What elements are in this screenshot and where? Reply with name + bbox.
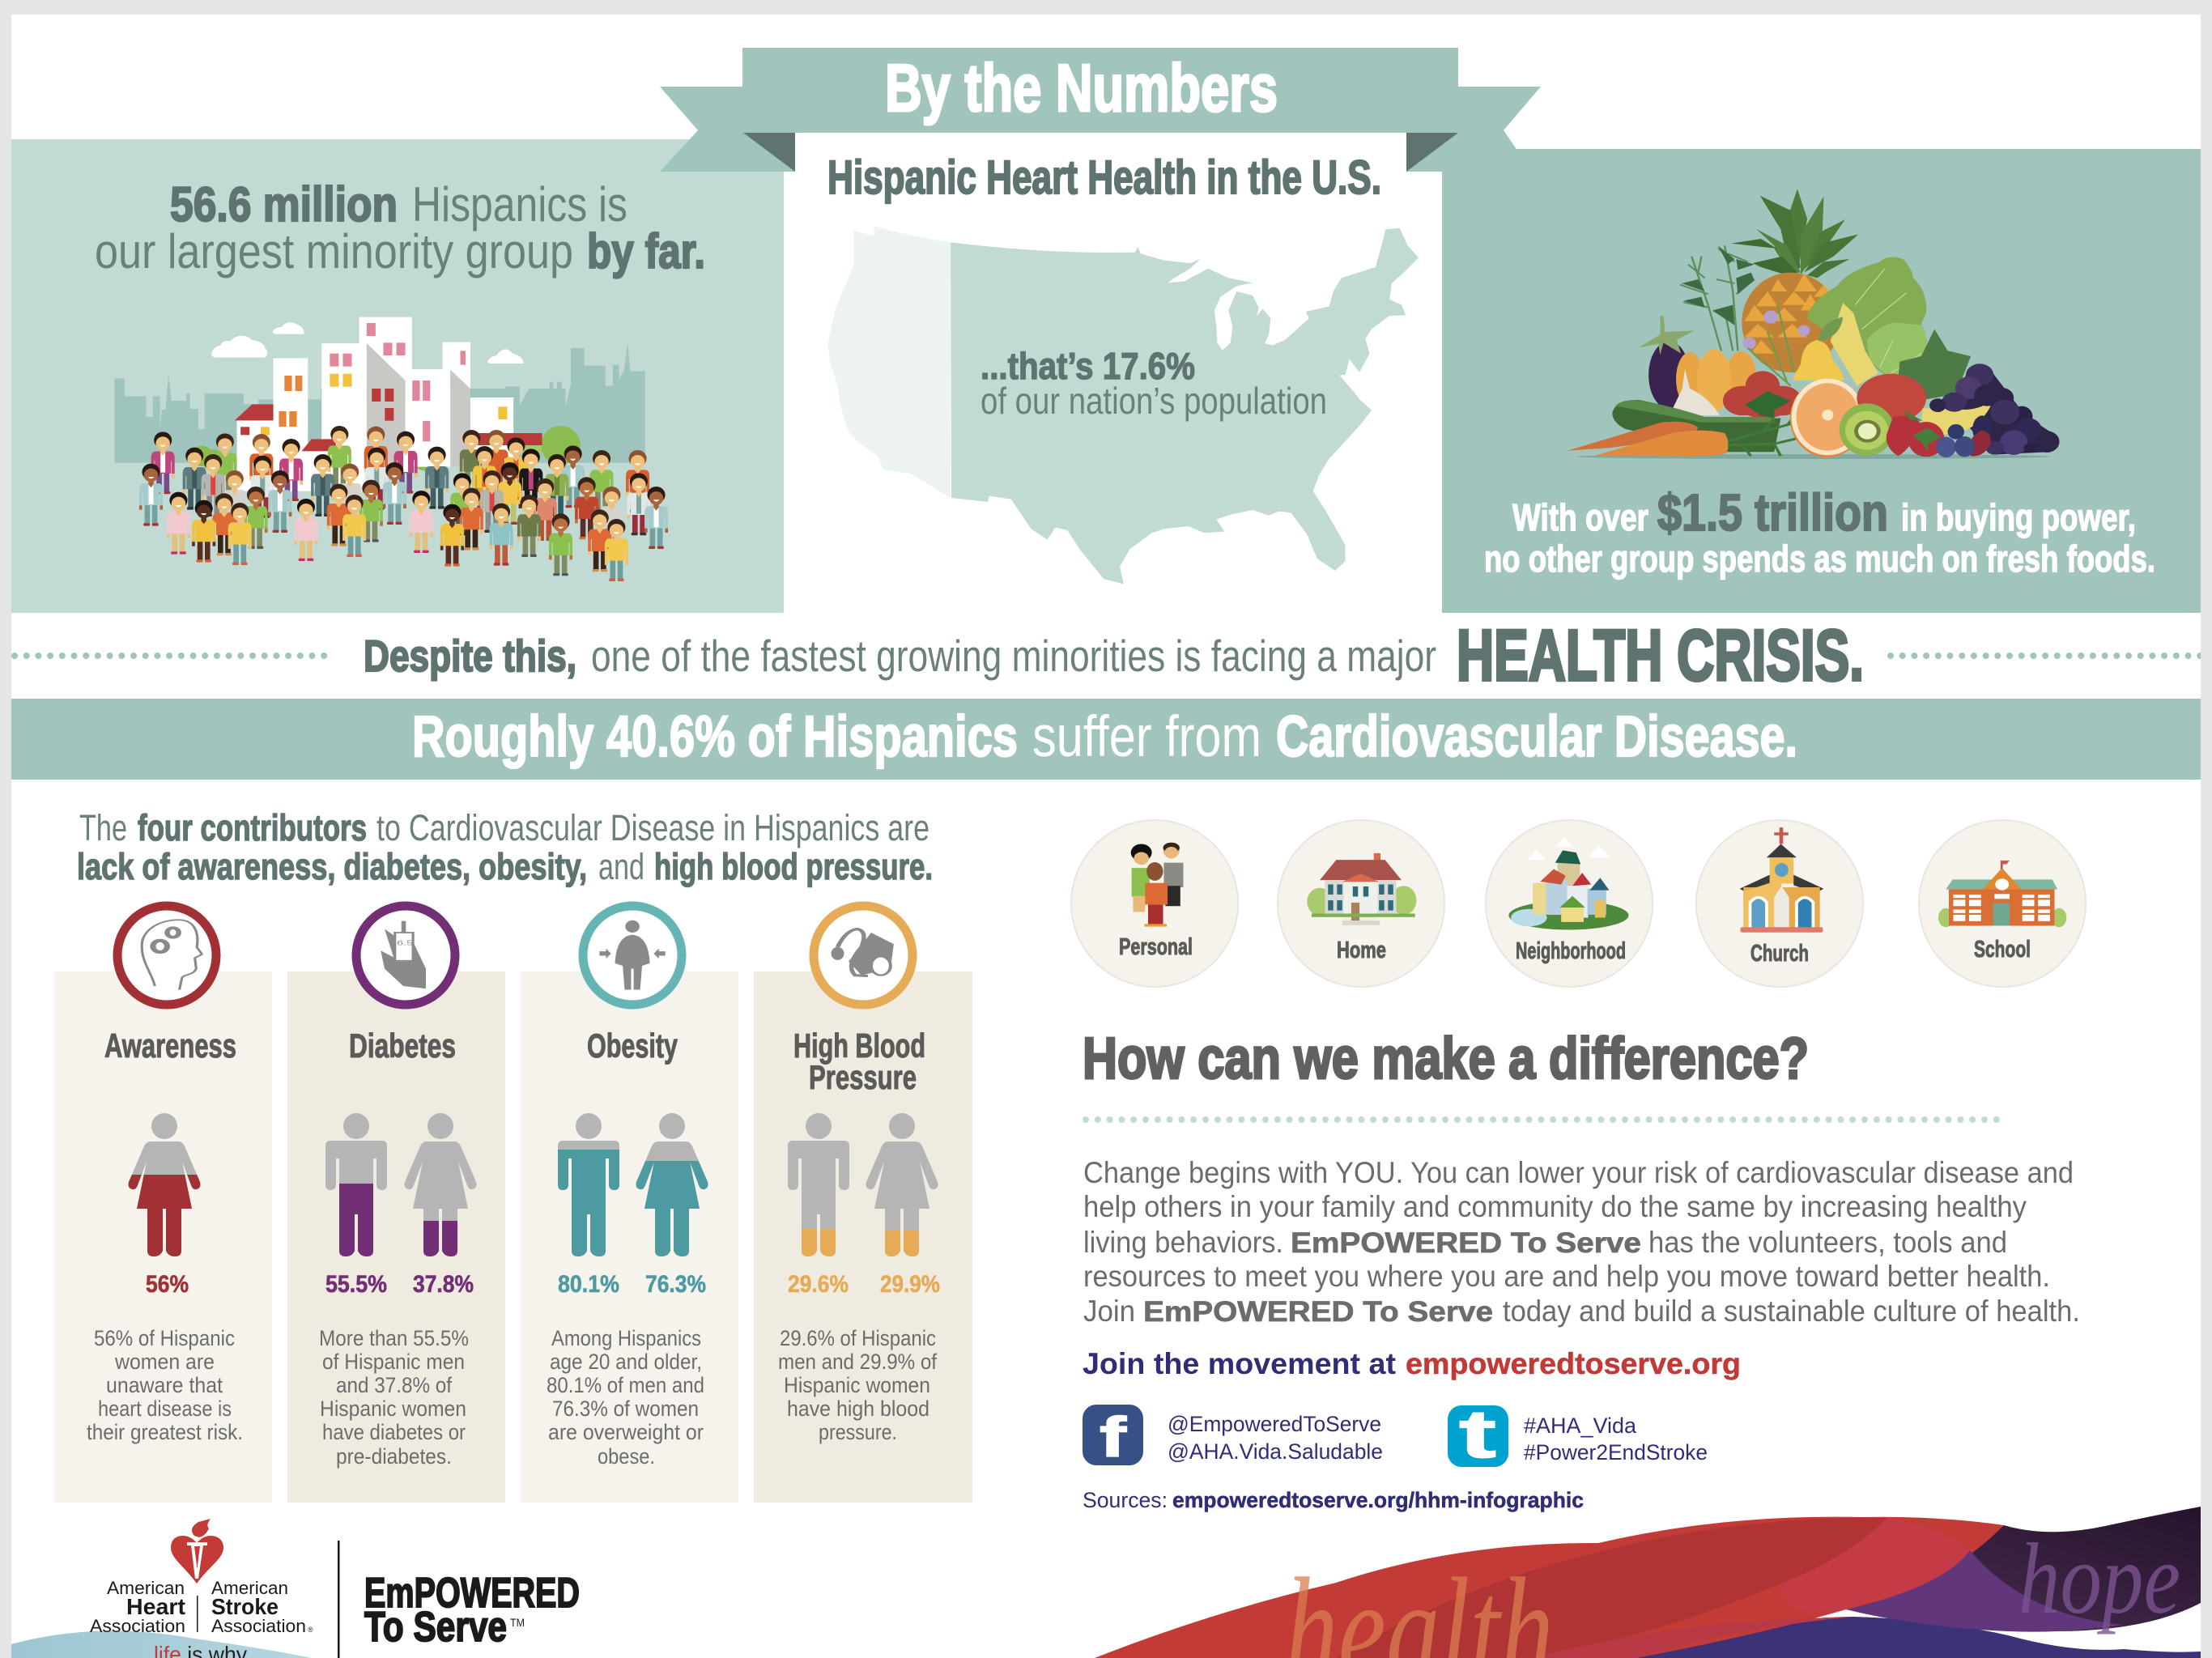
heading: How can we make a difference: How can we make a difference? [1083, 1027, 1809, 1091]
figure: man 80.1% [558, 1113, 619, 1256]
description: are overweight or [548, 1420, 704, 1444]
description: pre-diabetes. [336, 1444, 452, 1469]
people: back row [151, 426, 649, 518]
percentages: 55.5% [325, 1271, 387, 1298]
panel: Awareness [54, 906, 272, 1503]
herbs [1680, 245, 1755, 351]
icon: Facebook [1083, 1405, 1143, 1469]
circles: levels of change [1071, 820, 2086, 987]
description: men and 29.9% of [778, 1350, 937, 1374]
pineapple [1742, 273, 1840, 372]
logo: EmPOWERED To Serve: To Serve [364, 1604, 507, 1651]
body text: resources to meet you where you are and help you move toward better health. [1083, 1260, 2050, 1293]
icon: hand with glucose meter [356, 906, 455, 1005]
apple [1857, 374, 1926, 423]
buying power statement: in buying power, [1901, 496, 2136, 538]
logo: American Heart and Stroke Association: American [107, 1578, 185, 1598]
percentages: 29.6% [788, 1271, 849, 1298]
divider statement: health crisis: HEALTH CRISIS. [1457, 614, 1864, 695]
contributors intro: four contributors [138, 807, 367, 848]
icon: Facebook: f [1100, 1405, 1127, 1469]
banner: cardiovascular disease [11, 699, 2201, 780]
body text: EmPOWERED To Serve [1291, 1227, 1641, 1259]
description [319, 1326, 469, 1469]
carrots [1568, 391, 1820, 457]
banana [1921, 402, 1991, 435]
description: heart disease is [98, 1397, 232, 1421]
description: Hispanic women [320, 1397, 466, 1421]
figure: woman 37.8% [405, 1113, 476, 1256]
page edge: right margin [2201, 0, 2212, 1658]
grapes base [1953, 372, 2058, 455]
divider statement: health crisis: Despite this, [364, 631, 576, 681]
body text: EmPOWERED To Serve [1143, 1296, 1493, 1328]
logo: EmPOWERED To Serve: TM [510, 1616, 525, 1629]
population statement: Hispanics is [412, 177, 627, 232]
lettuce [1807, 257, 1927, 376]
percentages: 29.9% [880, 1271, 940, 1298]
banner: cardiovascular disease: Roughly 40.6% of Hispanics [412, 705, 1018, 769]
people: middle row [139, 462, 668, 549]
panel: population [11, 139, 784, 613]
label: Pressure [809, 1058, 917, 1096]
circle: Neighborhood [1486, 820, 1653, 987]
panel: buying power [1442, 149, 2201, 613]
illustration: city and crowd [114, 317, 668, 581]
label: Diabetes [349, 1027, 456, 1065]
body text: Change begins with YOU. You can lower your risk of cardiovascular disease and [1083, 1156, 2074, 1189]
subtitle: Hispanic Heart Health in the U.S. [827, 151, 1381, 204]
figure: woman 29.9% [866, 1113, 938, 1256]
orange slice [1790, 379, 1864, 457]
logo: American Heart and Stroke Association: American [211, 1578, 288, 1598]
description: Hispanic women [784, 1373, 930, 1397]
call to action: Join the movement at [1083, 1347, 1396, 1380]
divider statement: health crisis [15, 614, 2204, 695]
contributors intro: The [79, 807, 127, 848]
social: Twitter: #AHA_Vida [1524, 1414, 1637, 1438]
description [547, 1326, 704, 1469]
figure: man 29.6% [788, 1113, 849, 1256]
sources: empoweredtoserve.org/hhm-infographic [1172, 1488, 1584, 1512]
social: Twitter: #Power2EndStroke [1524, 1440, 1708, 1465]
yellow peppers [1676, 350, 1756, 411]
sources: Sources: [1083, 1488, 1168, 1512]
circle: Home: Home [1337, 937, 1386, 963]
percentages [788, 1271, 940, 1298]
description: Among Hispanics [551, 1326, 701, 1350]
icon: Twitter: t [1459, 1396, 1496, 1472]
figure: woman 56% [128, 1113, 201, 1256]
logo: American Heart and Stroke Association: ® [308, 1626, 313, 1634]
icon: Twitter [1448, 1396, 1508, 1472]
description: unaware that [106, 1373, 223, 1397]
description: pressure. [819, 1420, 897, 1444]
garlic [1670, 369, 1720, 415]
cherry and blueberries [1936, 424, 1991, 457]
body text: has the volunteers, tools and [1648, 1226, 2007, 1259]
description: 76.3% of women [552, 1397, 699, 1421]
panel: Diabetes [287, 906, 505, 1503]
zucchini [1612, 400, 1780, 452]
people: front row [167, 480, 628, 581]
percentage: 56% [146, 1271, 189, 1298]
kiwi [1840, 403, 1894, 456]
tomato [1723, 371, 1802, 419]
banner: By the Numbers [660, 48, 1541, 172]
description: their greatest risk. [87, 1420, 243, 1444]
label [793, 1027, 925, 1096]
logo: American Heart and Stroke Association [11, 1519, 313, 1658]
banner: cardiovascular disease: suffer from [1032, 705, 1261, 769]
description: women are [114, 1350, 215, 1374]
circle: Personal [1071, 820, 1238, 987]
description: of Hispanic men [322, 1350, 465, 1374]
description: age 20 and older, [550, 1350, 702, 1374]
buying power statement: $1.5 trillion [1657, 483, 1888, 542]
divider [338, 1541, 340, 1658]
grapes [1929, 363, 2060, 455]
body text: living behaviors. [1083, 1226, 1283, 1259]
icon: body with arrows [583, 906, 682, 1005]
banner: cardiovascular disease: Cardiovascular Disease. [1276, 705, 1797, 769]
body text: Join [1083, 1295, 1135, 1328]
description: 80.1% of men and [547, 1373, 704, 1397]
label: High Blood [793, 1027, 925, 1065]
circle: Church [1696, 820, 1863, 987]
circle: Home [1278, 820, 1444, 987]
contributors intro: and [598, 846, 644, 887]
percentages [558, 1271, 706, 1298]
squash [1831, 303, 1878, 386]
contributors intro: lack of awareness, diabetes, obesity, [77, 846, 587, 887]
percentages: 76.3% [645, 1271, 706, 1298]
logo: American Heart and Stroke Association: Stroke [211, 1594, 279, 1619]
description: have diabetes or [322, 1420, 466, 1444]
body text: today and build a sustainable culture of health. [1503, 1295, 2080, 1328]
call to action [1083, 1347, 1741, 1380]
contributors intro: high blood pressure. [654, 846, 933, 887]
divider statement: health crisis: one of the fastest growing minorities is facing a major [591, 631, 1436, 681]
logo: EmPOWERED To Serve: EmPOWERED [364, 1570, 580, 1617]
circle: Church: Church [1750, 941, 1809, 967]
logo: American Heart and Stroke Association: Association [90, 1616, 185, 1636]
contributors intro: to Cardiovascular Disease in Hispanics are [376, 807, 929, 848]
label: Awareness [104, 1027, 236, 1065]
word: hope: hope [2018, 1524, 2180, 1635]
buying power statement: With over [1512, 496, 1648, 538]
strawberries [1887, 410, 1944, 457]
contributors intro [77, 807, 933, 887]
circle: School: School [1974, 937, 2031, 963]
figure: woman 76.3% [636, 1113, 708, 1256]
body text: help others in your family and community do the same by increasing healthy [1083, 1190, 2027, 1223]
figure: man 55.5% [325, 1113, 387, 1256]
population statement: 56.6 million [170, 177, 398, 232]
logo: American Heart and Stroke Association: Association [211, 1616, 306, 1636]
eggplant [1639, 316, 1694, 409]
social: Facebook: @EmpoweredToServe [1168, 1412, 1381, 1436]
icon: hand with glucose meter: 6.5 [397, 940, 413, 947]
population statement [95, 177, 705, 278]
description: and 37.8% of [336, 1373, 452, 1397]
percentages [325, 1271, 474, 1298]
description: 29.6% of Hispanic [780, 1326, 936, 1350]
social: Twitter [1448, 1396, 1708, 1472]
call to action: empoweredtoserve.org [1406, 1347, 1741, 1380]
percentages: 80.1% [558, 1271, 619, 1298]
description: More than 55.5% [319, 1326, 469, 1350]
circle: Neighborhood: Neighborhood [1516, 938, 1626, 964]
icon: blood pressure cuff [814, 906, 912, 1005]
banner title: By the Numbers [885, 50, 1278, 125]
description [778, 1326, 937, 1444]
logo: American Heart and Stroke Association: Heart [126, 1594, 185, 1619]
body text [1083, 1156, 2080, 1328]
description: have high blood [787, 1397, 929, 1421]
social: Facebook: @AHA.Vida.Saludable [1168, 1439, 1383, 1464]
circle: Personal: Personal [1119, 934, 1193, 960]
map caption: ...that’s 17.6% [981, 345, 1195, 387]
map caption: of our nation’s population [981, 380, 1327, 422]
map: United States [827, 226, 1419, 585]
icon: heart and torch [171, 1519, 223, 1584]
illustration: fruits and vegetables [1568, 189, 2060, 459]
map caption [981, 345, 1327, 422]
back leaves [1898, 329, 1971, 400]
logo: EmPOWERED To Serve [364, 1570, 580, 1651]
circle: School [1919, 820, 2086, 987]
description: obese. [598, 1444, 655, 1469]
label: Obesity [587, 1027, 678, 1065]
buying power statement [1484, 483, 2155, 580]
description: 56% of Hispanic [94, 1326, 235, 1350]
description [87, 1326, 243, 1444]
pear [1793, 340, 1844, 380]
decorative swoosh with words [1095, 1507, 2201, 1658]
population statement: by far. [587, 224, 705, 278]
population statement: our largest minority group [95, 224, 573, 278]
social: Facebook [1083, 1405, 1383, 1469]
panel: High Blood Pressure [754, 906, 972, 1503]
panel: Obesity [521, 906, 738, 1503]
icon: head with gears [117, 906, 216, 1005]
percentages: 37.8% [413, 1271, 474, 1298]
pineapple crown [1731, 189, 1858, 278]
